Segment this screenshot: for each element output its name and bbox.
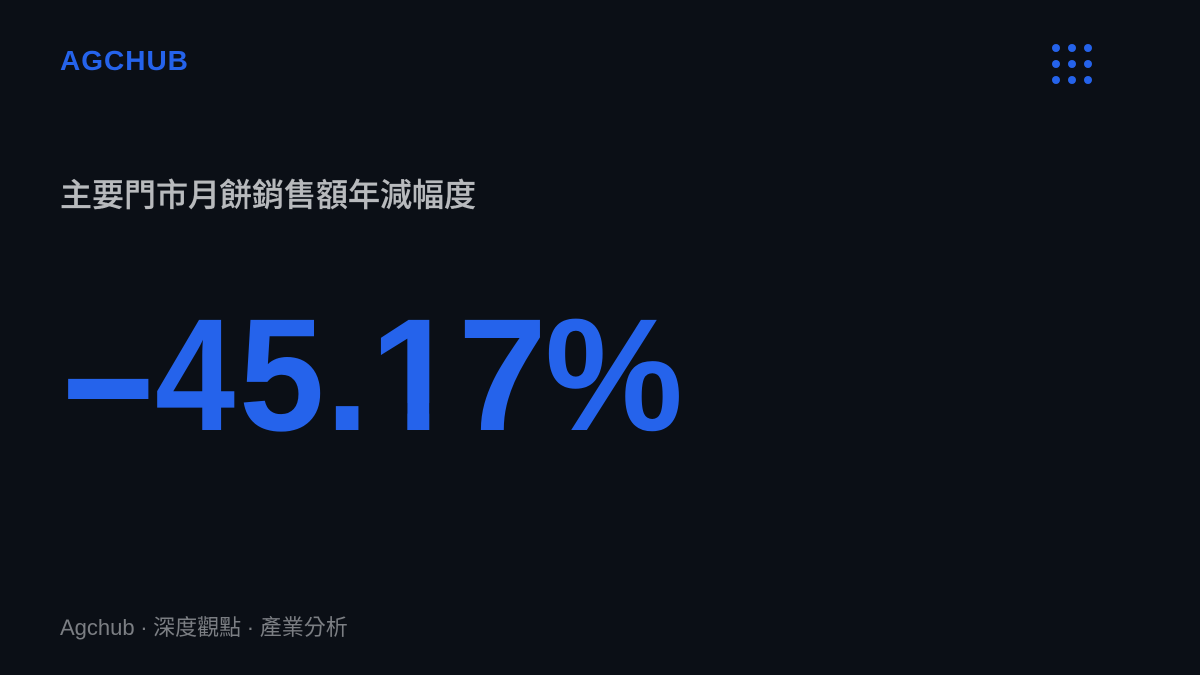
icon: dot grid [1052, 44, 1092, 84]
big number: % [545, 285, 683, 464]
big number: − [62, 283, 155, 489]
big number: 5 [239, 285, 324, 464]
heading: 主要門市月餅銷售額年減幅度 [60, 177, 476, 213]
brand logo text: AGCHUB [60, 45, 189, 76]
footer text: Agchub · 深度觀點 · 產業分析 [60, 615, 348, 640]
big number [62, 283, 683, 489]
big number: 7 [458, 285, 547, 464]
big number: . [325, 285, 369, 464]
big number: 1 [370, 285, 459, 464]
big number: 4 [155, 285, 235, 464]
